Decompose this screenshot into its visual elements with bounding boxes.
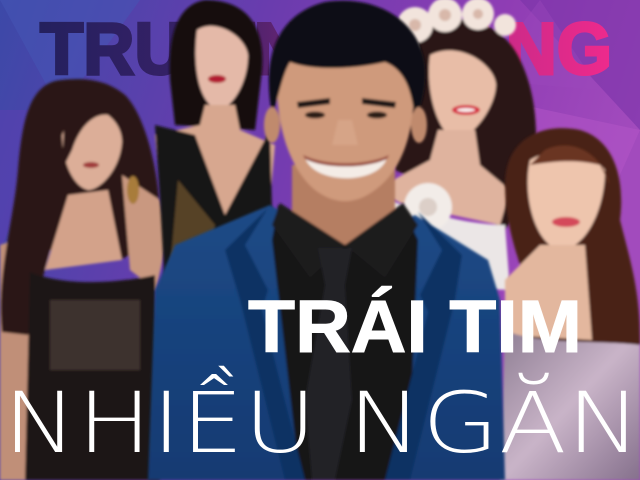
person: woman far left: [0, 79, 168, 480]
heading: TRÁI TIM: TRÁI TIM: [248, 285, 582, 368]
man: hair: [269, 1, 425, 120]
man: neck: [292, 165, 395, 245]
man: lapels: [225, 208, 462, 480]
man: tie: [305, 248, 352, 480]
title: background name: TRƯỜNG GIANG: [40, 9, 612, 90]
man: ears: [264, 107, 280, 143]
person: man center: [148, 1, 505, 480]
person: woman second left: [155, 0, 275, 290]
man: black shirt: [272, 205, 418, 480]
person: woman with flowers: [375, 0, 536, 290]
man: collar: [272, 203, 418, 278]
heading: NHIỀU NGĂN: NHIỀU NGĂN: [3, 365, 640, 472]
man: suit jacket: [148, 205, 505, 480]
man: smile: [305, 158, 387, 178]
man: head: [277, 42, 414, 201]
person: woman far right: [500, 128, 640, 480]
man: eyebrows and eyes: [297, 98, 396, 108]
